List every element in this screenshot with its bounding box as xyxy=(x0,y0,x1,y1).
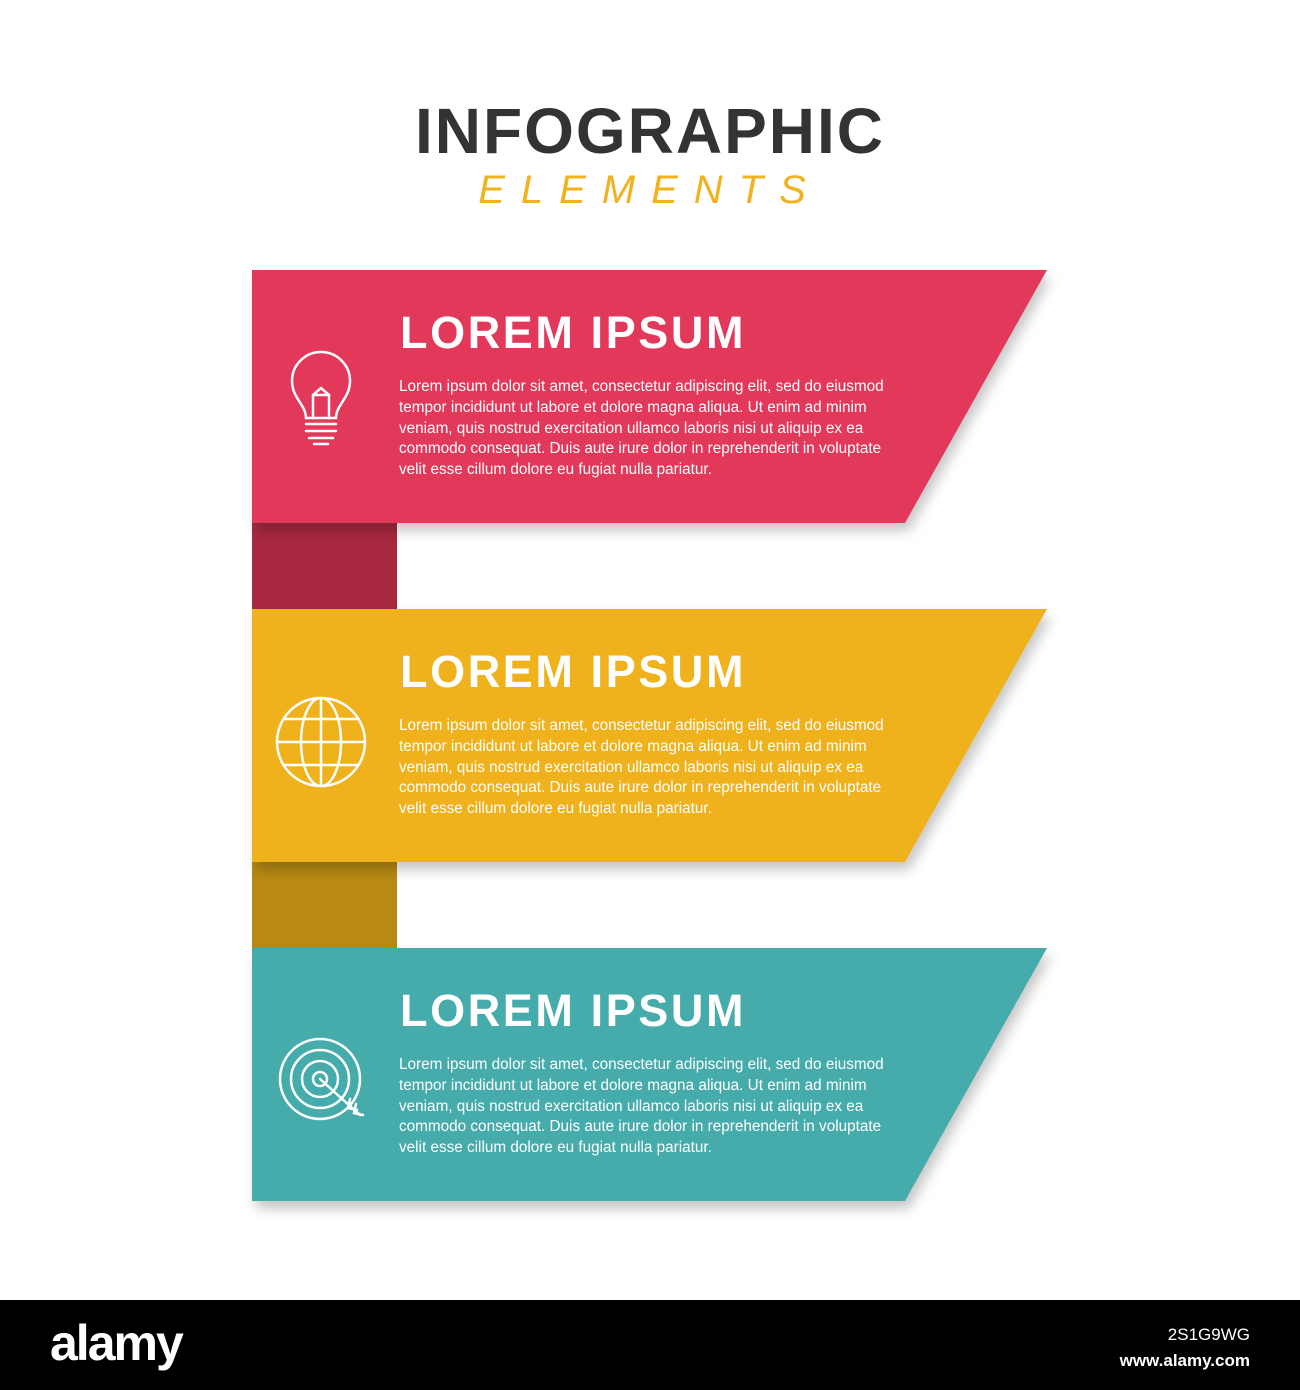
footer id xyxy=(1120,1325,1250,1370)
icon: globe xyxy=(277,698,365,786)
footer logo: alamy xyxy=(50,1315,182,1371)
text 2: Lorem ipsum dolor sit amet, consectetur adipiscing elit, sed do eiusmod tempor incididunt ut labore et dolore magna aliqua. Ut enim ad minim veniam, quis nostrud exercitation ullamco laboris nisi ut aliquip ex ea commodo consequat. Duis aute irure dolor in reprehenderit in voluptate velit esse cillum dolore eu fugiat nulla pariatur. xyxy=(399,717,884,817)
footer id: www.alamy.com xyxy=(1120,1351,1250,1370)
panel: red xyxy=(252,270,1047,523)
connector 1 xyxy=(252,520,397,612)
connector 2 xyxy=(252,859,397,951)
heading 3: LOREM IPSUM xyxy=(400,985,746,1036)
panel: teal xyxy=(252,948,1047,1201)
title: INFOGRAPHIC xyxy=(415,95,885,167)
subtitle: ELEMENTS xyxy=(478,168,822,212)
text 1: Lorem ipsum dolor sit amet, consectetur adipiscing elit, sed do eiusmod tempor incididunt ut labore et dolore magna aliqua. Ut enim ad minim veniam, quis nostrud exercitation ullamco laboris nisi ut aliquip ex ea commodo consequat. Duis aute irure dolor in reprehenderit in voluptate velit esse cillum dolore eu fugiat nulla pariatur. xyxy=(399,378,884,478)
icon: bulb xyxy=(292,352,350,444)
heading 1: LOREM IPSUM xyxy=(400,307,746,358)
text 3: Lorem ipsum dolor sit amet, consectetur adipiscing elit, sed do eiusmod tempor incididunt ut labore et dolore magna aliqua. Ut enim ad minim veniam, quis nostrud exercitation ullamco laboris nisi ut aliquip ex ea commodo consequat. Duis aute irure dolor in reprehenderit in voluptate velit esse cillum dolore eu fugiat nulla pariatur. xyxy=(399,1056,884,1156)
footer id: 2S1G9WG xyxy=(1168,1325,1250,1344)
heading 2: LOREM IPSUM xyxy=(400,646,746,697)
panel: yellow xyxy=(252,609,1047,862)
icon: target xyxy=(280,1039,363,1119)
footer bar xyxy=(0,1300,1300,1390)
